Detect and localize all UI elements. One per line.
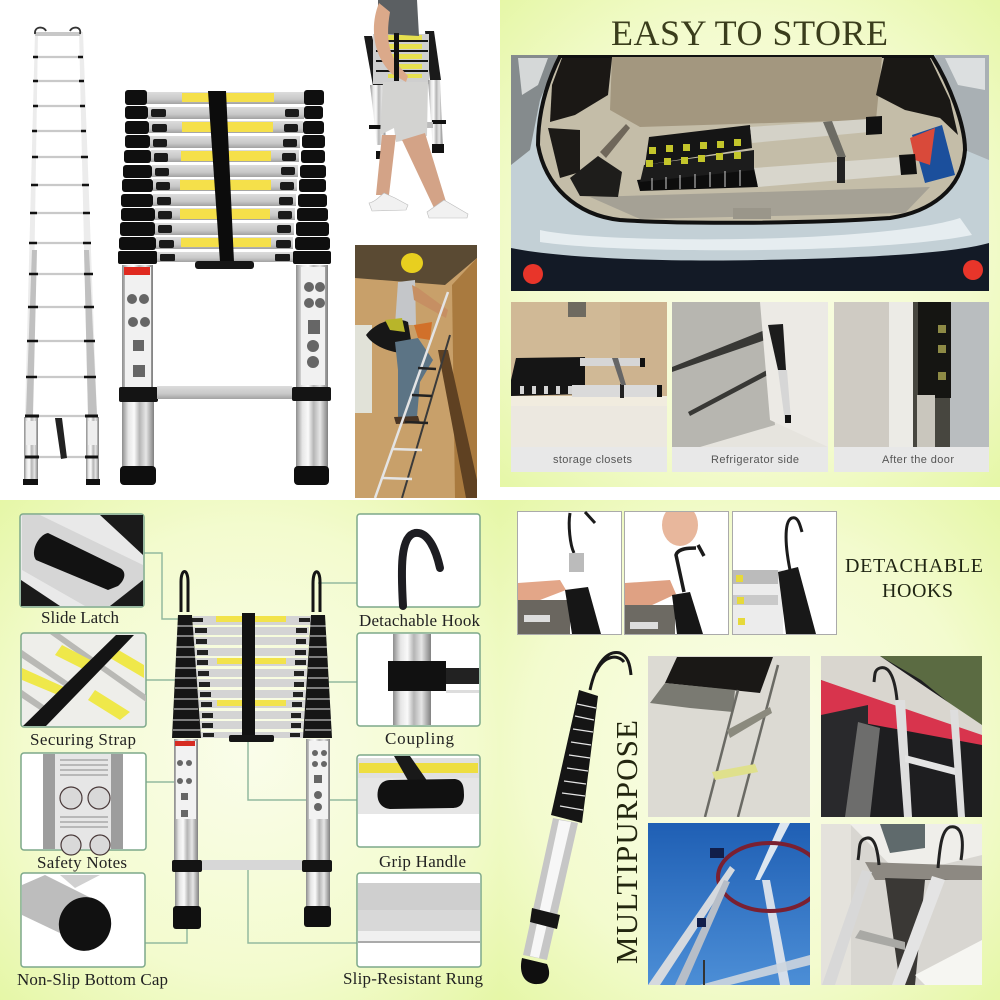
label: grip handle: Grip Handle [379,852,466,871]
right black stack [303,615,332,738]
center feature ladder [172,572,332,929]
heading: detachable hooks [845,555,983,602]
panel: detachable hook [357,514,480,630]
aluminium tube [523,818,578,960]
panel: non-slip bottom cap [17,873,168,989]
left black stack [172,615,201,738]
ladder on wall [375,292,450,498]
background: hooks and multipurpose quadrant [500,500,1000,1000]
back seat [610,57,882,127]
strap [242,613,255,735]
yellow safety labels [180,93,274,247]
bumper highlight [540,218,972,250]
shorts [380,82,428,142]
boots [394,416,420,424]
label: non-slip bottom cap: Non-Slip Bottom Cap [17,970,168,989]
arm [412,285,448,318]
right leg [292,265,331,485]
label: slip-resistant rung: Slip-Resistant Rung [343,969,484,988]
bumper lower [511,243,989,291]
yellow labels [216,616,286,706]
left leg [174,739,198,861]
rungs [193,616,311,738]
panel: securing strap [21,633,146,749]
heading: detachable hooks: DETACHABLE [845,555,983,577]
panel: grip handle [357,755,480,871]
caption: storage closets: storage closets [553,454,632,466]
heading: detachable hooks: HOOKS [882,580,953,602]
carried ladder [364,31,446,159]
trunk opening [538,56,965,223]
arm [374,3,408,82]
extended pole with hook [521,653,631,984]
caption: after the door: After the door [882,454,954,466]
hook photo 3 [732,512,836,634]
latches [186,618,310,737]
car body sides [511,55,558,165]
dark left wall [550,58,612,122]
callout lines [144,553,357,943]
bottom cap [521,958,549,984]
photo panel: after the door [834,302,989,472]
red reflectors [523,264,543,284]
hook photo 1 [518,512,622,634]
tank top [395,280,416,325]
collapsed main ladder [118,90,331,485]
hook [590,653,631,690]
photo: van roof [821,656,982,817]
hooks [181,572,320,612]
helmet [401,253,423,273]
shoes [369,193,408,211]
strap and grip handle [208,91,234,262]
background: white product quadrant [0,0,500,500]
photo panel: storage closets [511,302,667,472]
caption: refrigerator side: Refrigerator side [711,454,799,466]
dark right wall [876,58,958,135]
stored ladder [637,116,917,191]
caption: after the door [834,447,989,472]
label: detachable hook: Detachable Hook [359,611,480,630]
label: slide latch: Slide Latch [41,608,120,627]
hook photo 2 [624,504,728,634]
right leg [306,739,330,861]
strap on bundle [394,33,399,81]
left box and shovel [548,128,580,178]
bottom rung [202,860,302,870]
shirt [378,0,419,36]
black stack [551,690,598,823]
rungs [146,92,306,262]
caption: storage closets [511,447,667,472]
jeans [395,338,433,417]
bottom rung [157,386,292,399]
hook photo strip [518,504,836,634]
blue bag [912,125,955,183]
background: easy to store quadrant [500,0,1000,487]
photo panel: refrigerator side [672,302,828,472]
title: easy to store: EASY TO STORE [611,13,888,53]
trunk latch [733,208,771,219]
label: coupling: Coupling [385,729,454,748]
legs [376,133,447,208]
right black stack [293,90,331,264]
photo: hooks on ledge [821,824,982,985]
panel: slip-resistant rung [343,873,484,988]
heading: multipurpose: MULTIPURPOSE [609,720,644,964]
caption: refrigerator side [672,447,828,472]
slide latches [151,109,299,261]
front floor shade [590,187,930,219]
panel: coupling [357,633,480,748]
photo: car trunk [511,55,989,291]
person carrying ladder [364,0,468,218]
label: safety notes: Safety Notes [37,853,127,872]
extended thin ladder [23,28,100,485]
ladder shadow [438,350,477,498]
left leg [119,265,158,485]
tool bag [366,320,411,353]
left black stack [118,90,157,264]
photo: attic hatch [648,656,810,817]
label: securing strap: Securing Strap [30,730,136,749]
panel: slide latch [20,514,144,627]
photo: basketball hoop [648,823,822,985]
background: features quadrant [0,500,500,1000]
photo: worker on ladder [355,245,477,498]
panel: safety notes [21,753,146,872]
